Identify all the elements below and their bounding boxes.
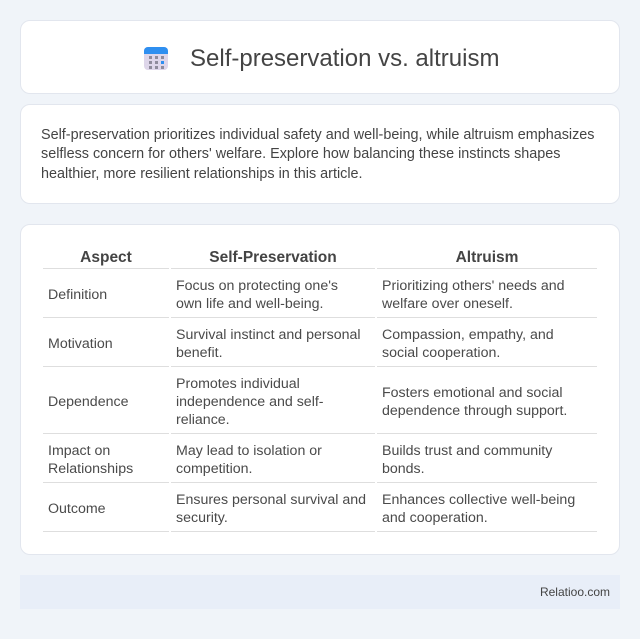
title: Self-preservation vs. altruism bbox=[190, 45, 499, 72]
row: definition: own life and well-being. bbox=[176, 296, 323, 312]
panel: introduction bbox=[20, 104, 620, 204]
row: definition: Focus on protecting one's bbox=[176, 278, 338, 294]
column headers bbox=[80, 249, 518, 266]
row: motivation bbox=[48, 327, 554, 361]
row: outcome: and cooperation. bbox=[382, 510, 488, 526]
intro text: healthier, more resilient relationships in this article. bbox=[41, 166, 363, 182]
footer bar bbox=[20, 575, 620, 609]
row: definition: welfare over oneself. bbox=[382, 296, 513, 312]
row: impact on relationships: Impact on bbox=[48, 443, 110, 459]
row: dependence: Fosters emotional and social bbox=[382, 385, 563, 401]
row: dependence: Dependence bbox=[48, 394, 128, 410]
footer brand: Relatioo.com bbox=[540, 585, 610, 599]
panel: comparison table bbox=[20, 224, 620, 555]
row: definition: Definition bbox=[48, 287, 107, 303]
row: definition bbox=[48, 278, 565, 312]
column headers: Aspect bbox=[80, 249, 132, 266]
row: outcome: Enhances collective well-being bbox=[382, 492, 575, 508]
row: dependence: independence and self- bbox=[176, 394, 324, 410]
row: dependence: Promotes individual bbox=[176, 376, 300, 392]
row: outcome bbox=[48, 492, 575, 526]
comparison table bbox=[43, 249, 597, 532]
row: impact on relationships bbox=[48, 443, 552, 477]
row: motivation: Compassion, empathy, and bbox=[382, 327, 554, 343]
row: dependence: dependence through support. bbox=[382, 403, 567, 419]
row: outcome: Outcome bbox=[48, 501, 106, 517]
column headers: Self-Preservation bbox=[209, 249, 337, 266]
row: motivation: Motivation bbox=[48, 336, 113, 352]
row: outcome: Ensures personal survival and bbox=[176, 492, 366, 508]
intro text: Self-preservation prioritizes individual safety and well-being, while altruism emphasizes bbox=[41, 126, 594, 142]
row: dependence bbox=[48, 376, 567, 428]
panel: title card bbox=[20, 20, 620, 94]
intro text: selfless concern for others' welfare. Explore how balancing these instincts shapes bbox=[41, 146, 560, 162]
row: impact on relationships: Builds trust and community bbox=[382, 443, 552, 459]
row: definition: Prioritizing others' needs and bbox=[382, 278, 565, 294]
row: impact on relationships: Relationships bbox=[48, 461, 133, 477]
row: motivation: Survival instinct and personal bbox=[176, 327, 361, 343]
icon: calendar bbox=[144, 47, 168, 70]
row: impact on relationships: May lead to isolation or bbox=[176, 443, 322, 459]
row: outcome: security. bbox=[176, 510, 228, 526]
row: impact on relationships: competition. bbox=[176, 461, 252, 477]
row: dependence: reliance. bbox=[176, 412, 230, 428]
column headers: Altruism bbox=[456, 249, 518, 266]
row: motivation: social cooperation. bbox=[382, 345, 500, 361]
row: impact on relationships: bonds. bbox=[382, 461, 425, 477]
intro text bbox=[41, 126, 594, 182]
row: motivation: benefit. bbox=[176, 345, 223, 361]
